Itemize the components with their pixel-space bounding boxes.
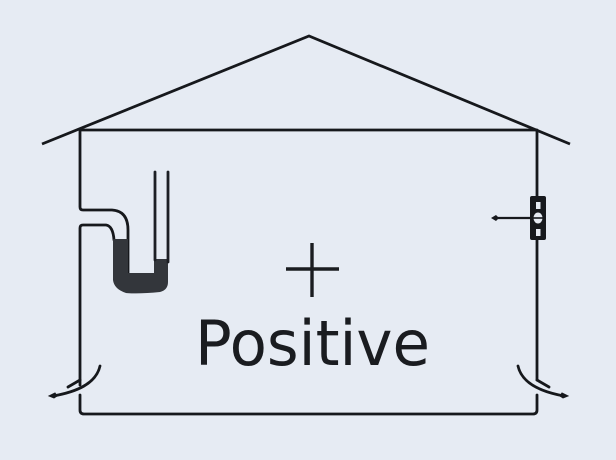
- house walls and floor: [80, 130, 537, 414]
- label: Positive: Positive: [195, 307, 430, 380]
- arrow: right lower flap: [518, 366, 568, 398]
- manometer fluid: [113, 239, 168, 293]
- manometer: [113, 172, 168, 293]
- icon: plus sign: [286, 243, 339, 297]
- roof: [42, 36, 570, 144]
- arrow: left lower flap: [49, 366, 100, 398]
- icon: vent with outflow arrow: [491, 196, 546, 240]
- manometer tubes: [155, 172, 168, 262]
